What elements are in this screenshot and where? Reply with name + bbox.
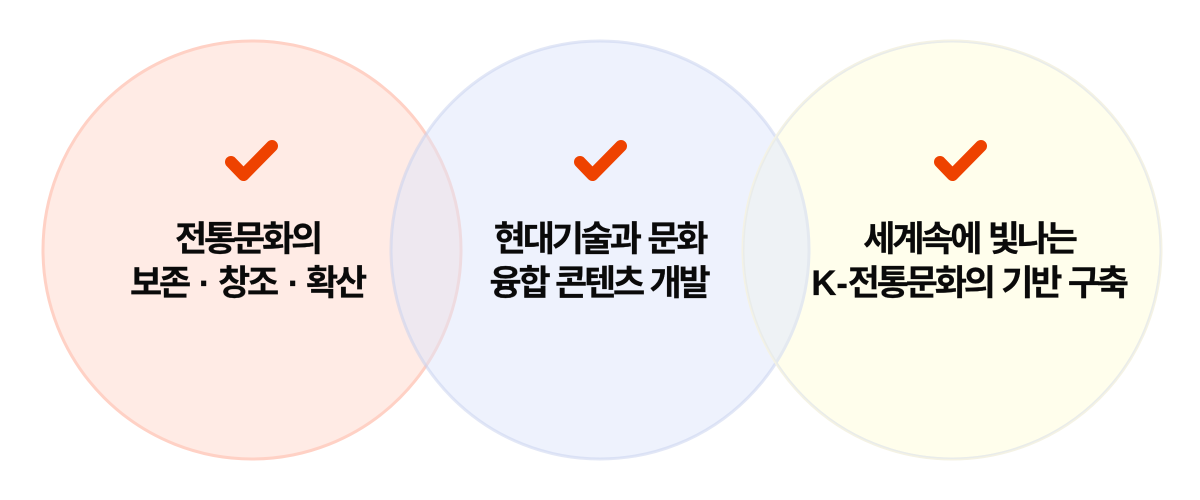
panel: K-culture circle <box>742 40 1162 460</box>
icon: check mark left <box>231 146 272 175</box>
icon: check mark center <box>580 146 621 175</box>
text: modern technology label: 현대기술과 문화 <box>494 220 708 259</box>
text: preservation label <box>130 220 367 303</box>
text: K-culture label: K-전통문화의 기반 구축 <box>811 264 1128 303</box>
panel: modern technology circle <box>391 41 809 459</box>
text: preservation label: 확산 <box>306 264 367 303</box>
text: preservation label: · <box>288 264 296 303</box>
text: preservation label: 창조 <box>218 264 278 303</box>
text: preservation label: 보존 <box>130 264 190 303</box>
text: preservation label: · <box>199 264 207 303</box>
panel: preservation circle <box>43 41 461 459</box>
text: preservation label: 전통문화의 <box>175 220 320 259</box>
icon: check mark right <box>940 146 981 175</box>
text: K-culture label <box>811 220 1128 303</box>
text: K-culture label: 세계속에 빛나는 <box>863 220 1077 259</box>
text: modern technology label: 융합 콘텐츠 개발 <box>489 264 711 303</box>
text: modern technology label <box>489 220 711 303</box>
